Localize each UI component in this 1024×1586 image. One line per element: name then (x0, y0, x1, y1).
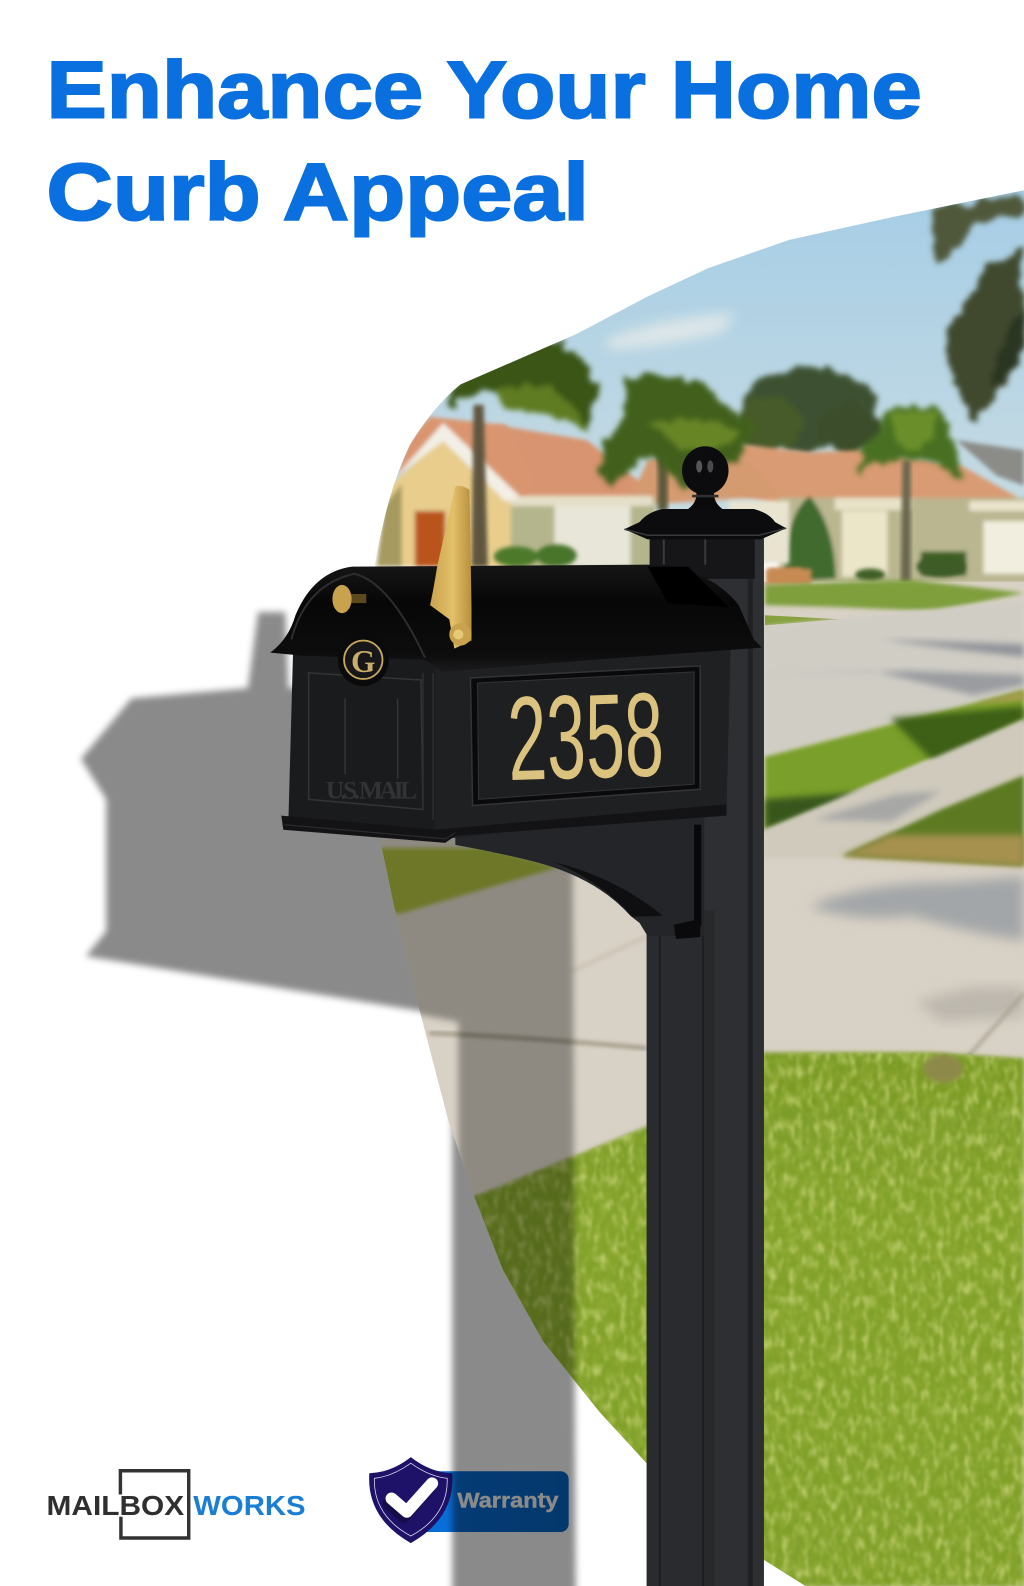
mailbox base trim (281, 804, 727, 843)
logo: Mailbox Works: MAILBOX (47, 1490, 184, 1521)
driveway shadows (809, 876, 1024, 941)
badge label (420, 1471, 569, 1532)
left grass (374, 848, 559, 914)
title (47, 45, 922, 238)
grass strip (765, 690, 1024, 830)
logo: Mailbox Works: WORKS (193, 1490, 306, 1521)
concrete cracks (429, 1033, 648, 1048)
grass triangle (842, 775, 1024, 866)
palm trees (450, 342, 963, 602)
logo: Mailbox Works (47, 1471, 306, 1538)
shadow falling across the photo (380, 838, 578, 1385)
title: Enhance Your Home (47, 45, 922, 135)
badge label: Warranty (457, 1489, 559, 1513)
sky (364, 182, 1024, 516)
front lawn (467, 1052, 1024, 1586)
middle roof and wall (496, 425, 789, 569)
sidewalk (765, 719, 1024, 858)
mailbox end face (288, 637, 435, 840)
post cap with ball finial (624, 446, 786, 579)
warranty badge (369, 1457, 569, 1543)
mailbox cast shadow (81, 612, 607, 1586)
monogram medallion (338, 635, 389, 686)
icon: shield with check (369, 1457, 452, 1543)
embossed U.S. Mail: U.S. MAIL (326, 776, 417, 804)
road (765, 602, 984, 626)
top right palms (932, 194, 1024, 423)
monogram medallion: G (351, 644, 375, 679)
background tree (737, 367, 882, 456)
background photo: residential street (374, 190, 1024, 1586)
number plate: 2358 (506, 668, 666, 806)
gold flag (430, 486, 472, 649)
yellow house with gable (376, 417, 536, 567)
number plate (471, 666, 700, 806)
post (647, 526, 764, 1586)
shrubs at lawn edge (766, 557, 965, 585)
mailbox on post (270, 446, 786, 1586)
far lawn (765, 580, 1024, 611)
street ground base (374, 582, 1024, 1586)
support bracket (455, 815, 704, 936)
grey roof far right (956, 440, 1024, 486)
gold knob (332, 585, 366, 613)
mailbox side body (430, 632, 749, 840)
mailbox domed roof (270, 565, 762, 672)
hedge (494, 544, 577, 567)
title: Curb Appeal (47, 148, 589, 238)
house row right (723, 442, 1024, 585)
